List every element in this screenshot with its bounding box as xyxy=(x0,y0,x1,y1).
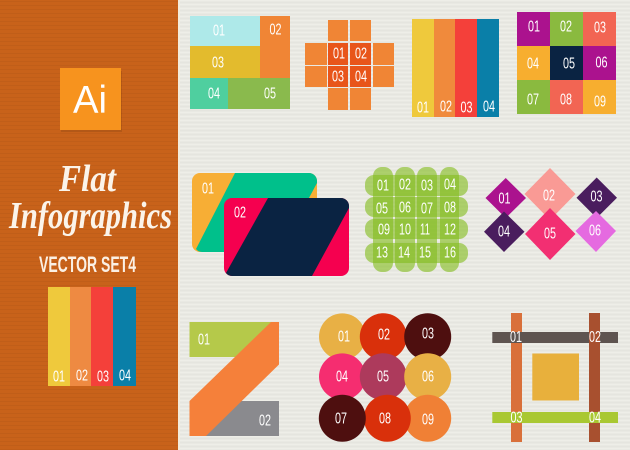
panel: five block rectangle: 01 xyxy=(213,22,225,40)
panel: four columns: 04 xyxy=(483,98,495,116)
panel: nine square grid: 04 xyxy=(527,56,539,72)
panel: green sixteen grid: 02 xyxy=(399,176,411,194)
card 01 xyxy=(192,173,317,252)
subtitle: vector set4: VECTOR SET4 xyxy=(39,252,136,277)
panel: green sixteen grid: 08 xyxy=(444,200,456,216)
panel: five block rectangle: 05 xyxy=(264,86,276,102)
card 02 xyxy=(224,198,349,276)
panel: nine circles: 07 xyxy=(335,410,347,428)
panel: green sixteen grid: 10 xyxy=(399,222,411,238)
panel: four columns: 01 xyxy=(417,100,429,116)
panel: diamonds: 05 xyxy=(544,226,556,242)
panel: green sixteen grid: 04 xyxy=(444,176,456,194)
panel: green sixteen grid: 09 xyxy=(378,222,390,238)
icon: Ai logo xyxy=(60,68,122,132)
panel: Z shape: 01 xyxy=(198,332,210,348)
panel: nine circles: 02 xyxy=(378,326,390,344)
panel: green sixteen grid: 13 xyxy=(376,244,388,262)
panel: diamonds: 01 xyxy=(498,190,511,208)
panel: green sixteen grid: 15 xyxy=(419,244,431,262)
panel: nine square grid xyxy=(517,12,616,114)
panel: green sixteen grid: 11 xyxy=(420,222,430,238)
panel: diamonds: 04 xyxy=(498,224,510,240)
panel: green sixteen grid: 14 xyxy=(398,244,410,262)
panel: diamonds: 06 xyxy=(589,222,601,240)
panel: green sixteen grid: 01 xyxy=(377,178,389,194)
panel: nine square grid: 06 xyxy=(596,54,608,72)
panel: woven frame xyxy=(492,313,618,442)
chart: sidebar four columns: 01 xyxy=(53,368,65,386)
icon: Ai logo: Ai xyxy=(73,79,107,122)
panel: nine circles: 08 xyxy=(379,410,391,428)
chart: sidebar four columns: 02 xyxy=(76,368,88,384)
panel: orange cross grid xyxy=(305,20,394,110)
panel: diamonds xyxy=(484,168,617,260)
chart: sidebar four columns: 03 xyxy=(97,368,109,386)
title: Flat Infographics: Infographics xyxy=(8,195,172,237)
panel: nine square grid: 01 xyxy=(528,18,540,36)
panel: four columns xyxy=(412,19,499,117)
panel: nine square grid: 08 xyxy=(560,92,572,108)
panel: green sixteen grid: 16 xyxy=(444,244,456,262)
panel: green sixteen grid: 07 xyxy=(421,200,433,218)
panel: green sixteen grid: 03 xyxy=(421,178,433,194)
panel: orange cross grid: 01 xyxy=(333,46,345,62)
panel: five block rectangle: 03 xyxy=(212,54,224,72)
chart: sidebar four columns: 04 xyxy=(119,368,131,384)
panel: nine circles: 06 xyxy=(422,368,434,386)
panel: green sixteen grid: 05 xyxy=(376,200,388,218)
panel: overlapping cards xyxy=(192,173,349,276)
panel: green sixteen grid: 06 xyxy=(399,200,411,216)
panel: four columns: 02 xyxy=(440,98,452,116)
panel: nine circles: 05 xyxy=(377,368,389,386)
panel: green sixteen grid xyxy=(365,167,468,272)
card 02: 02 xyxy=(234,204,246,222)
chart: sidebar four columns xyxy=(48,287,136,386)
title: Flat Infographics: Flat xyxy=(58,158,117,200)
panel: four columns: 03 xyxy=(460,100,473,116)
panel: orange cross grid: 04 xyxy=(355,68,367,86)
panel: nine square grid: 02 xyxy=(560,18,572,36)
panel: orange cross grid: 02 xyxy=(355,46,367,62)
panel: nine circles: 04 xyxy=(336,368,348,386)
panel: left sidebar xyxy=(0,0,180,450)
panel: nine square grid: 05 xyxy=(563,56,575,72)
panel: nine square grid: 09 xyxy=(594,94,606,110)
panel: nine circles: 09 xyxy=(422,412,434,428)
panel: nine circles xyxy=(319,313,451,442)
panel: nine square grid: 03 xyxy=(594,20,606,36)
panel: woven frame: 03 xyxy=(510,410,523,426)
panel: five block rectangle: 02 xyxy=(270,22,282,38)
panel: Z shape xyxy=(190,322,279,436)
panel: diamonds: 02 xyxy=(543,188,555,204)
panel: woven frame: 02 xyxy=(589,329,601,346)
panel: green sixteen grid: 12 xyxy=(444,222,456,238)
panel: nine circles: 01 xyxy=(338,328,350,346)
panel: nine square grid: 07 xyxy=(527,92,539,108)
panel: woven frame: 04 xyxy=(589,410,601,426)
panel: Z shape: 02 xyxy=(259,412,271,430)
panel: five block rectangle xyxy=(190,16,290,109)
card 01: 01 xyxy=(202,180,214,198)
panel: woven frame: 01 xyxy=(510,329,522,346)
panel: nine circles: 03 xyxy=(422,326,434,342)
panel: orange cross grid: 03 xyxy=(332,68,344,86)
panel: five block rectangle: 04 xyxy=(208,86,220,102)
panel: diamonds: 03 xyxy=(590,188,603,206)
title: Flat Infographics xyxy=(8,158,172,237)
